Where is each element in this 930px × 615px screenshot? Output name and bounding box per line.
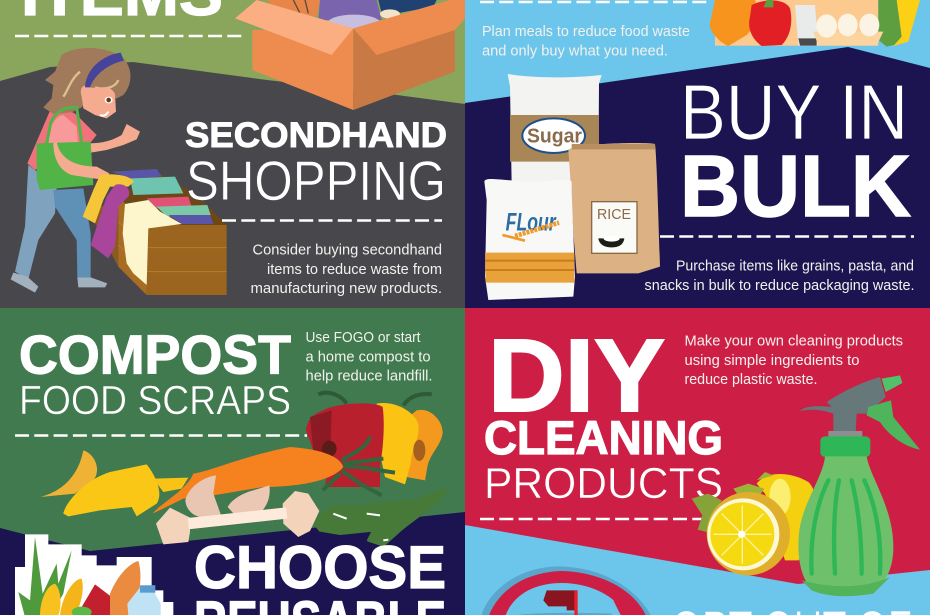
icon: food scraps xyxy=(40,393,447,545)
panel: compost food scraps xyxy=(0,308,465,615)
panel: diy cleaning products xyxy=(465,308,930,615)
icon: cardboard box of clothes xyxy=(235,0,465,110)
icon: sugar flour and rice bags xyxy=(484,74,660,300)
text: bulk description xyxy=(644,258,914,294)
text: plan meals: Plan meals to reduce food waste xyxy=(482,23,690,40)
icon: woman browsing clothes chest xyxy=(11,48,227,295)
text: diy description xyxy=(684,332,903,388)
text: bulk description: snacks in bulk to reduce packaging waste. xyxy=(644,277,914,294)
heading: diy cleaning products: DIY xyxy=(488,318,665,433)
text: diy description: using simple ingredients to xyxy=(684,352,860,369)
heading: buy in bulk xyxy=(680,68,911,235)
text: diy description: Make your own cleaning products xyxy=(684,332,903,350)
text: secondhand description: Consider buying secondhand xyxy=(252,242,442,258)
panel: opt out of xyxy=(481,566,912,615)
heading: buy in bulk: BULK xyxy=(680,138,911,235)
heading: secondhand shopping: SHOPPING xyxy=(186,149,446,212)
text: plan meals: and only buy what you need. xyxy=(482,42,668,60)
heading: compost food scraps: FOOD SCRAPS xyxy=(19,377,291,423)
icon: reusable grocery items xyxy=(15,534,173,615)
icon: groceries xyxy=(710,0,920,47)
heading: secondhand shopping xyxy=(185,116,447,212)
panel: secondhand shopping xyxy=(0,0,465,308)
icon: spray bottle xyxy=(798,375,920,596)
panel: choose reusable xyxy=(15,534,446,615)
heading: diy cleaning products: PRODUCTS xyxy=(484,459,723,508)
text: compost description: help reduce landfill. xyxy=(306,368,432,384)
text: compost description: Use FOGO or start xyxy=(306,329,421,346)
text: compost description: a home compost to xyxy=(306,348,430,366)
heading: compost food scraps: COMPOST xyxy=(19,324,291,386)
text: bulk description: Purchase items like grains, pasta, and xyxy=(676,258,914,274)
icon: no junk mail sign xyxy=(481,566,652,615)
heading: compost food scraps xyxy=(19,324,291,423)
heading: diy cleaning products: CLEANING xyxy=(484,411,723,464)
text: plan meals xyxy=(482,23,690,60)
icon: sugar flour and rice bags: RICE xyxy=(597,207,631,223)
text: secondhand description xyxy=(250,242,442,297)
icon: sugar flour and rice bags: Sugar xyxy=(527,125,582,148)
text: compost description xyxy=(306,329,432,384)
text: diy description: reduce plastic waste. xyxy=(684,371,818,388)
panel: buy in bulk xyxy=(465,0,930,308)
text: secondhand description: items to reduce waste from xyxy=(267,261,442,278)
text: secondhand description: manufacturing new products. xyxy=(250,280,442,297)
heading: choose reusable: CHOOSE xyxy=(194,534,446,601)
heading: secondhand shopping: SECONDHAND xyxy=(185,116,447,155)
heading: diy cleaning products xyxy=(484,318,723,508)
icon: lemons xyxy=(692,472,816,575)
icon: sugar flour and rice bags: FLour xyxy=(506,210,557,237)
